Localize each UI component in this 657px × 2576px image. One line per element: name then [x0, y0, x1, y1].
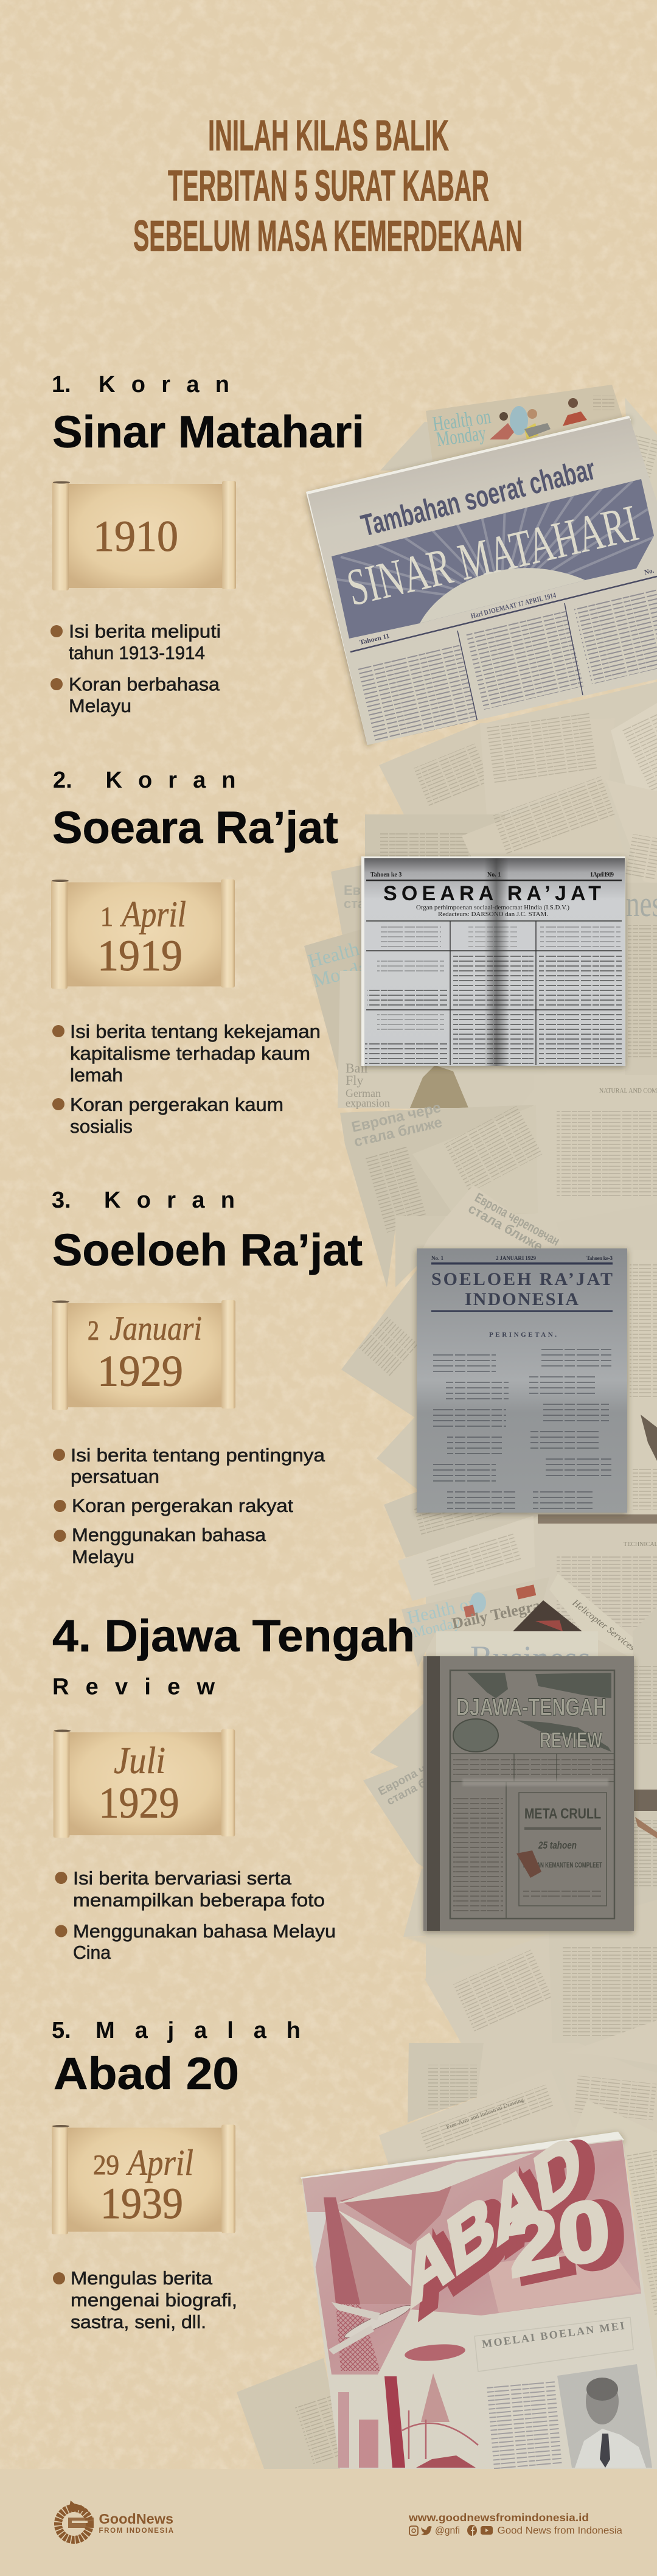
newspaper collage background: Monday: [310, 953, 379, 992]
newspaper: Soeara Ra'jat: Organ perhimpoenan sociaal-democraat Hindia (I.S.D.V.): [416, 905, 570, 911]
newspaper collage background: Daily Telegra: [450, 1597, 542, 1633]
date scroll: [52, 2124, 235, 2234]
footer: [0, 2469, 657, 2576]
bullets: Koran pergerakan rakyat: [72, 1495, 293, 1516]
logo: GoodNews from Indonesia: [58, 2501, 173, 2539]
label: 3.: [52, 1188, 71, 1213]
label: Majalah: [96, 2018, 301, 2043]
heading: Soeloeh Ra’jat: [52, 1225, 363, 1275]
newspaper collage background: стала ближе: [352, 1114, 444, 1150]
bullets: tahun 1913-1914: [69, 642, 205, 663]
date scroll: [52, 481, 236, 590]
magazine: Abad 20: [301, 2115, 657, 2471]
newspaper: Djawa Tengah Review: DJAWA-TENGAH: [456, 1694, 607, 1721]
section 1: Koran Sinar Matahari: [50, 372, 364, 716]
newspaper: Sinar Matahari: No.: [644, 567, 655, 576]
title: [133, 112, 523, 261]
newspaper collage background: Европа че: [376, 1760, 434, 1798]
heading: Soeara Ra’jat: [52, 802, 338, 853]
bullets: persatuan: [71, 1466, 159, 1487]
magazine: Abad 20: MOELAI BOELAN MEI: [481, 2319, 625, 2350]
newspaper collage background: expansion: [346, 1097, 390, 1109]
date scroll: 1910: [93, 512, 178, 561]
bullets: Menggunakan bahasa: [72, 1524, 266, 1545]
icon: instagram: [409, 2526, 418, 2535]
newspaper collage background: Free-Arm and Industrial Drawing: [445, 2096, 525, 2131]
heading: 4. Djawa Tengah: [52, 1611, 415, 1661]
date scroll: 29: [93, 2149, 119, 2181]
label: Koran: [99, 372, 229, 397]
heading: Sinar Matahari: [52, 407, 364, 457]
website and social links: Good News from Indonesia: [498, 2525, 623, 2536]
newspaper collage background: Monday: [411, 1615, 462, 1641]
newspaper: Djawa Tengah Review: 25 tahoen: [538, 1839, 577, 1851]
bullets: [53, 1444, 325, 1567]
newspaper collage background: German: [346, 1087, 381, 1099]
icon: facebook: [467, 2525, 477, 2536]
bullets: Isi berita tentang pentingnya: [71, 1444, 325, 1466]
newspaper collage background: ста: [344, 896, 366, 911]
newspaper: Soeloeh Ra'jat Indonesia: No. 1: [431, 1255, 443, 1261]
newspaper: Sinar Matahari: Tahoen 11: [359, 632, 390, 646]
website and social links: @gnfi: [435, 2525, 460, 2536]
label: Koran: [104, 1188, 235, 1213]
logo: GoodNews from Indonesia: FROM INDONESIA: [99, 2527, 173, 2535]
newspaper: Soeloeh Ra'jat Indonesia: SOELOEH RA’JAT: [431, 1269, 613, 1289]
label: 5.: [52, 2018, 71, 2043]
newspaper: Soeara Ra'jat: Redacteurs: DARSONO dan J.C. STAM.: [438, 911, 548, 918]
newspaper: Soeara Ra'jat: [361, 856, 625, 1066]
date scroll: 1929: [97, 1346, 183, 1395]
bullets: kapitalisme terhadap kaum: [70, 1043, 310, 1064]
newspaper collage background: Health on: [305, 931, 385, 972]
newspaper collage background: стала бл: [384, 1774, 434, 1808]
newspaper: Soeloeh Ra'jat Indonesia: PERINGETAN.: [489, 1331, 557, 1339]
bullets: Menggunakan bahasa Melayu: [73, 1920, 336, 1942]
website and social links: www.goodnewsfromindonesia.id: [408, 2511, 589, 2524]
date scroll: 1919: [97, 931, 182, 980]
newspaper: Djawa Tengah Review: REVIEW: [540, 1727, 602, 1752]
date scroll: April: [125, 2143, 193, 2183]
logo: GoodNews from Indonesia: GoodNews: [99, 2511, 173, 2527]
portrait photo: [557, 2364, 652, 2468]
bullets: sosialis: [70, 1116, 133, 1137]
bullets: [53, 2267, 237, 2333]
bullets: Cina: [73, 1942, 111, 1963]
maps and globe: [467, 1673, 611, 1752]
newspaper: Soeara Ra'jat: No. 1: [487, 872, 501, 878]
newspaper collage background: Европа чере: [350, 1099, 442, 1136]
bullets: sastra, seni, dll.: [71, 2311, 206, 2333]
newspaper collage background: Business: [470, 1639, 591, 1679]
cover title: 20: [504, 2180, 614, 2295]
bullets: Isi berita bervariasi serta: [73, 1867, 292, 1889]
label: 1.: [52, 372, 71, 397]
cover title: 20: [516, 2183, 626, 2298]
papers behind Sinar Matahari: Monday: [435, 422, 487, 451]
newspaper collage background: Bail: [346, 1060, 368, 1076]
date scroll: [51, 879, 235, 989]
newspaper collage background: Европа череповчан: [473, 1190, 562, 1249]
newspaper: Soeara Ra'jat: Tahoen ke 3: [370, 872, 401, 878]
title: INILAH KILAS BALIK: [208, 112, 449, 160]
newspaper collage background: Health on: [405, 1592, 479, 1628]
date scroll: [54, 1729, 235, 1838]
section 4: Djawa Tengah Review: [52, 1611, 415, 1963]
bullets: Isi berita tentang kekejaman: [70, 1021, 321, 1042]
section 5: Majalah Abad 20: [52, 2018, 301, 2333]
newspaper: Soeara Ra'jat: 1 April 1919: [590, 872, 614, 878]
heading: Abad 20: [54, 2048, 239, 2099]
newspaper: Soeloeh Ra'jat Indonesia: [417, 1248, 627, 1513]
bullets: [55, 1867, 336, 1963]
poem lines: [433, 1345, 613, 1513]
icon: twitter: [421, 2526, 432, 2535]
date scroll: Januari: [109, 1310, 202, 1348]
date scroll: [52, 1300, 235, 1410]
cover title: ABAD: [399, 2115, 586, 2323]
bullets: menampilkan beberapa foto: [73, 1889, 325, 1911]
column text: [350, 576, 657, 744]
bullets: mengenai biografi,: [71, 2289, 237, 2311]
label: Koran: [106, 768, 236, 793]
bullets: Mengulas berita: [71, 2267, 213, 2289]
date scroll: Juli: [114, 1740, 165, 1782]
newspaper: Sinar Matahari: [306, 385, 657, 745]
newspaper: Soeara Ra'jat: SOEARA RA’JAT: [383, 882, 601, 905]
illustrated cover art: [302, 2140, 641, 2468]
bullets: Koran berbahasa: [69, 673, 220, 695]
newspaper: Soeloeh Ra'jat Indonesia: Tahoen ke-3: [586, 1255, 613, 1261]
papers behind Sinar Matahari: Health on: [431, 405, 492, 436]
article box: [474, 2317, 633, 2371]
bullets: [50, 621, 221, 716]
date scroll: 1939: [100, 2179, 183, 2228]
bullets: [52, 1021, 321, 1137]
newspaper collage background: стала ближе: [466, 1201, 545, 1254]
newspaper: Soeloeh Ra'jat Indonesia: 2 JANUARI 1929: [496, 1255, 537, 1261]
website and social links: [408, 2511, 623, 2536]
section 2: Koran Soeara Ra'jat: [51, 768, 338, 1137]
newspaper: Djawa Tengah Review: [423, 1656, 634, 1931]
newspaper: Djawa Tengah Review: PAKEAN KEMANTEN COMPLEET: [523, 1861, 602, 1869]
date scroll: 1929: [99, 1779, 179, 1827]
bullets: Isi berita meliputi: [69, 621, 221, 642]
newspaper: Djawa Tengah Review: META CRULL: [524, 1805, 601, 1822]
label: Review: [52, 1674, 215, 1699]
date scroll: 2: [88, 1315, 99, 1346]
section 3: Koran Soeloeh Ra'jat: [52, 1188, 363, 1567]
newspaper collage background: Fly: [346, 1073, 363, 1088]
papers behind Sinar Matahari: [380, 385, 657, 511]
date scroll: 1: [100, 901, 113, 932]
bullets: Koran pergerakan kaum: [70, 1094, 283, 1115]
newspaper collage background: Helicopter Services: [570, 1597, 637, 1653]
bullets: lemah: [70, 1064, 123, 1086]
icon: youtube: [481, 2526, 493, 2535]
newspaper collage background: Евр: [344, 883, 369, 898]
bullets: Melayu: [72, 1546, 134, 1567]
newspaper collage background: [237, 682, 657, 2469]
bullets: Melayu: [69, 695, 131, 716]
newspaper: Sinar Matahari: Hari DJOEMAAT 17 APRIL 1914: [470, 590, 557, 620]
label: 2.: [53, 768, 72, 793]
date scroll: April: [120, 894, 186, 934]
cover title: ABAD: [411, 2119, 599, 2328]
banner rays: [328, 481, 657, 603]
newspaper: Soeloeh Ra'jat Indonesia: INDONESIA: [465, 1289, 579, 1309]
